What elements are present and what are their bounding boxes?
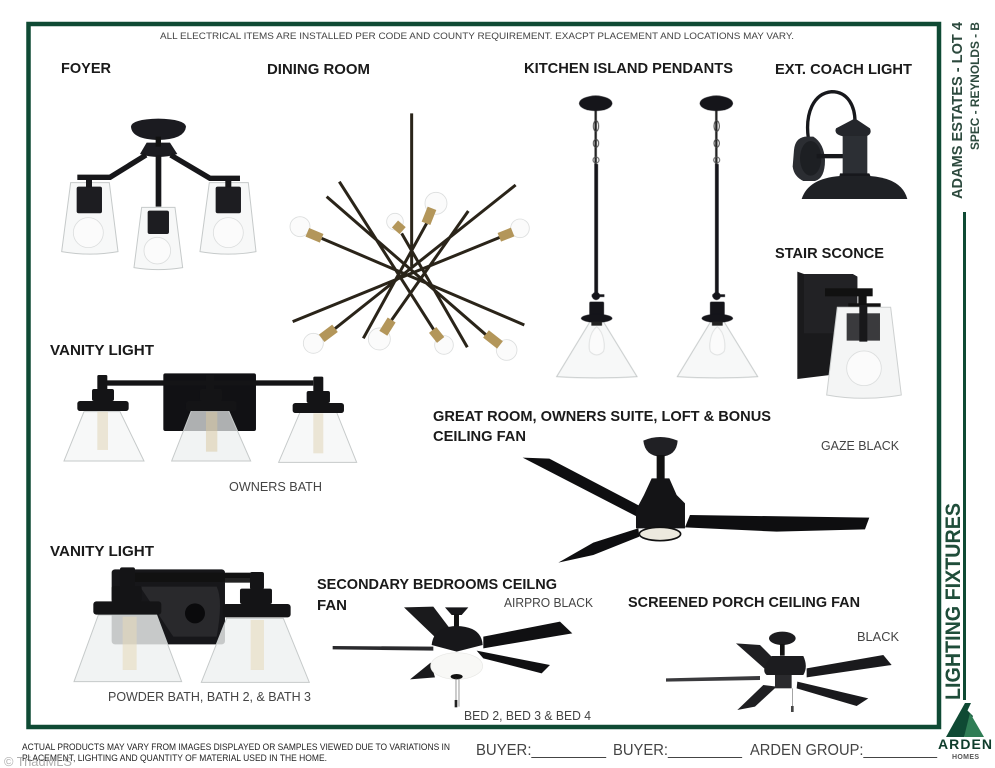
bottom disclaimer [22,742,450,764]
fixture: two-light vanity [74,567,309,682]
pendant left [557,96,637,378]
signature lines: ARDEN GROUP:_________ [750,742,938,759]
shade right [279,377,357,462]
bottom disclaimer: PLACEMENT, LIGHTING AND QUANTITY OF MATERIAL USED IN THE HOME. [22,753,327,764]
logo: arden homes: ARDEN [938,736,992,752]
heading: great room ceiling fan: GREAT ROOM, OWNERS SUITE, LOFT & BONUS [433,408,771,425]
fixture: secondary bedrooms five-blade fan [333,607,572,707]
heading: great room ceiling fan: CEILING FAN [433,428,526,445]
signature lines [476,742,938,759]
side title: adams estates: ADAMS ESTATES - LOT 4 [949,21,966,199]
caption: black: BLACK [857,630,900,644]
heading: secondary bedrooms ceiling fan: SECONDARY BEDROOMS CEILNG [317,576,557,593]
shade center [172,375,251,461]
heading: vanity light owners bath: VANITY LIGHT [50,342,154,359]
logo: arden homes [938,703,992,761]
logo: arden homes: HOMES [952,754,979,761]
caption: powder bath: POWDER BATH, BATH 2, & BATH 3 [108,690,311,704]
caption: owners bath: OWNERS BATH [229,480,322,494]
side vertical rule [963,212,966,700]
heading: great room ceiling fan [433,408,771,445]
heading: stair sconce: STAIR SCONCE [775,245,884,262]
fixture: screened porch five-blade fan [666,632,892,712]
caption: bedrooms: BED 2, BED 3 & BED 4 [464,709,591,723]
fixture: great room three-blade ceiling fan [523,437,869,563]
fixture: dining room sputnik chandelier [290,113,529,360]
caption: gaze black: GAZE BLACK [821,439,900,453]
side title: lighting fixtures: LIGHTING FIXTURES [942,503,965,700]
signature lines: BUYER:_________ [476,742,607,759]
heading: exterior coach light: EXT. COACH LIGHT [775,61,912,78]
heading: foyer: FOYER [61,60,111,77]
fixture: exterior coach light [793,92,907,199]
shade left [64,375,144,461]
heading: vanity light powder bath: VANITY LIGHT [50,543,154,560]
fixture: stair sconce [797,272,901,398]
bottom disclaimer: ACTUAL PRODUCTS MAY VARY FROM IMAGES DISPLAYED OR SAMPLES VIEWED DUE TO VARIATIONS IN [22,742,450,753]
heading: dining room: DINING ROOM [267,61,370,78]
pendant right [677,96,758,378]
shade left [74,567,182,682]
heading: kitchen island pendants: KITCHEN ISLAND PENDANTS [524,60,733,77]
side subtitle: spec reynolds: SPEC - REYNOLDS - B [968,22,982,150]
heading: secondary bedrooms ceiling fan: FAN [317,597,347,614]
fixture: three-light vanity [64,373,357,462]
caption: airpro black: AIRPRO BLACK [504,596,594,610]
top disclaimer note: ALL ELECTRICAL ITEMS ARE INSTALLED PER CODE AND COUNTY REQUIREMENT. EXACPT PLACEMENT AND LOCATIONS MAY VARY. [160,31,794,42]
fixture: foyer semi-flush light [62,119,256,270]
shade right [201,572,309,682]
heading: screened porch ceiling fan: SCREENED PORCH CEILING FAN [628,594,860,611]
signature lines: BUYER:_________ [613,742,743,759]
fixture: kitchen island pendants [557,96,758,378]
heading: secondary bedrooms ceiling fan [317,576,557,614]
